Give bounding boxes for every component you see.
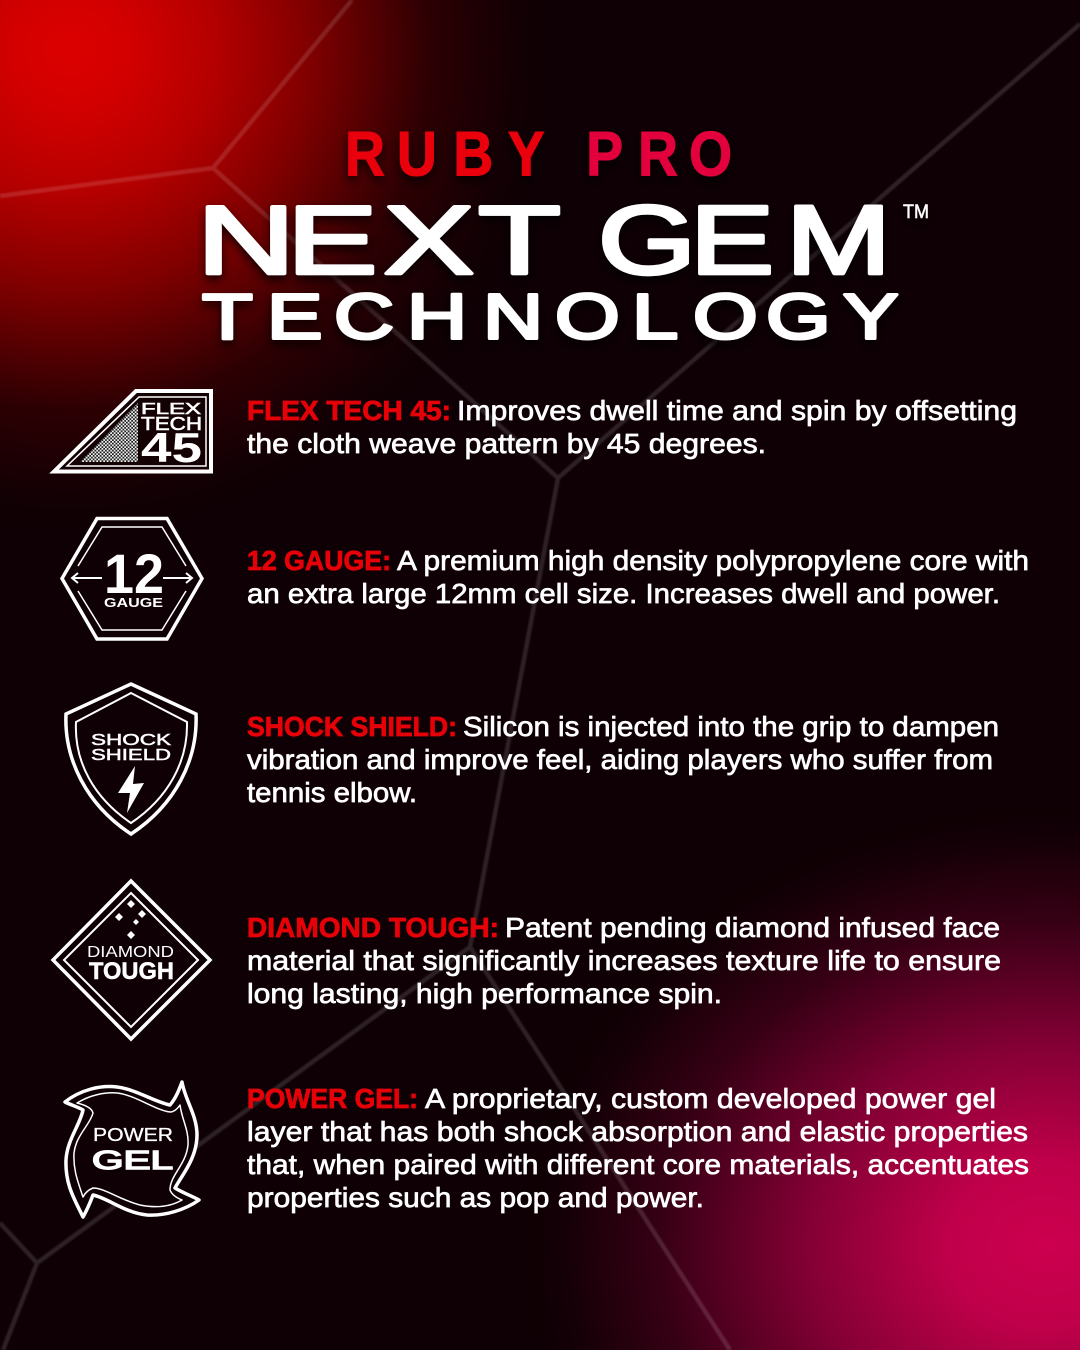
icon: 12 gauge: GAUGE <box>104 595 163 610</box>
icon: diamond tough: DIAMOND <box>87 944 174 961</box>
text: shock shield: SHOCK SHIELD: <box>247 711 457 742</box>
heading: TECHNOLOGY: TECHNOLOGY <box>202 281 899 352</box>
subtitle: RUBY PRO: RUBY <box>345 118 545 189</box>
text: diamond tough <box>247 912 1001 1009</box>
text: flex tech 45: the cloth weave pattern by 45 degrees. <box>247 428 766 459</box>
text: shock shield <box>247 711 999 808</box>
heading: GEM: GEM <box>598 186 891 294</box>
text: power gel: POWER GEL: <box>247 1083 418 1114</box>
text: 12 gauge: A premium high density polypropylene core with <box>397 545 1029 576</box>
title <box>197 118 929 352</box>
text: diamond tough: Patent pending diamond infused face <box>505 912 1000 943</box>
icon: flex tech 45: FLEX <box>141 401 202 418</box>
text: power gel <box>247 1083 1029 1213</box>
text: diamond tough: long lasting, high performance spin. <box>247 978 722 1009</box>
icon: power gel: POWER <box>93 1125 173 1145</box>
icon: shock shield: SHIELD <box>91 747 171 764</box>
icon: diamond tough: TOUGH <box>89 958 174 985</box>
icon: power gel <box>65 1082 199 1217</box>
trademark: TM <box>903 202 929 223</box>
text: shock shield: Silicon is injected into the grip to dampen <box>463 711 999 742</box>
text: shock shield: tennis elbow. <box>247 777 417 808</box>
icon: 12 gauge <box>62 518 202 639</box>
icon: diamond tough <box>53 881 210 1039</box>
text: power gel: properties such as pop and power. <box>247 1182 704 1213</box>
text: 12 gauge: 12 GAUGE: <box>247 545 391 576</box>
subtitle: RUBY PRO: PRO <box>586 118 732 189</box>
text: 12 gauge <box>247 545 1029 609</box>
text: diamond tough: material that significantly increases texture life to ensure <box>247 945 1001 976</box>
heading: NEXT: NEXT <box>197 186 561 295</box>
subtitle: RUBY PRO <box>345 118 732 189</box>
text: power gel: A proprietary, custom developed power gel <box>425 1083 996 1114</box>
text: diamond tough: DIAMOND TOUGH: <box>247 912 499 943</box>
icon: flex tech 45 <box>54 391 211 472</box>
text: flex tech 45: Improves dwell time and spin by offsetting <box>457 395 1017 426</box>
text: power gel: that, when paired with different core materials, accentuates <box>247 1149 1029 1180</box>
icon: shock shield <box>66 684 196 834</box>
text: 12 gauge: an extra large 12mm cell size. Increases dwell and power. <box>247 578 1000 609</box>
icon: flex tech 45: TECH <box>141 414 202 434</box>
text: shock shield: vibration and improve feel, aiding players who suffer from <box>247 744 993 775</box>
icon: flex tech 45: 45 <box>141 424 202 471</box>
icon: shock shield: SHOCK <box>91 732 171 749</box>
text: flex tech 45 <box>247 395 1017 459</box>
text: flex tech 45: FLEX TECH 45: <box>247 395 451 426</box>
icon: power gel: GEL <box>92 1145 173 1175</box>
icon: 12 gauge: 12 <box>104 542 164 605</box>
text: power gel: layer that has both shock absorption and elastic properties <box>247 1116 1028 1147</box>
